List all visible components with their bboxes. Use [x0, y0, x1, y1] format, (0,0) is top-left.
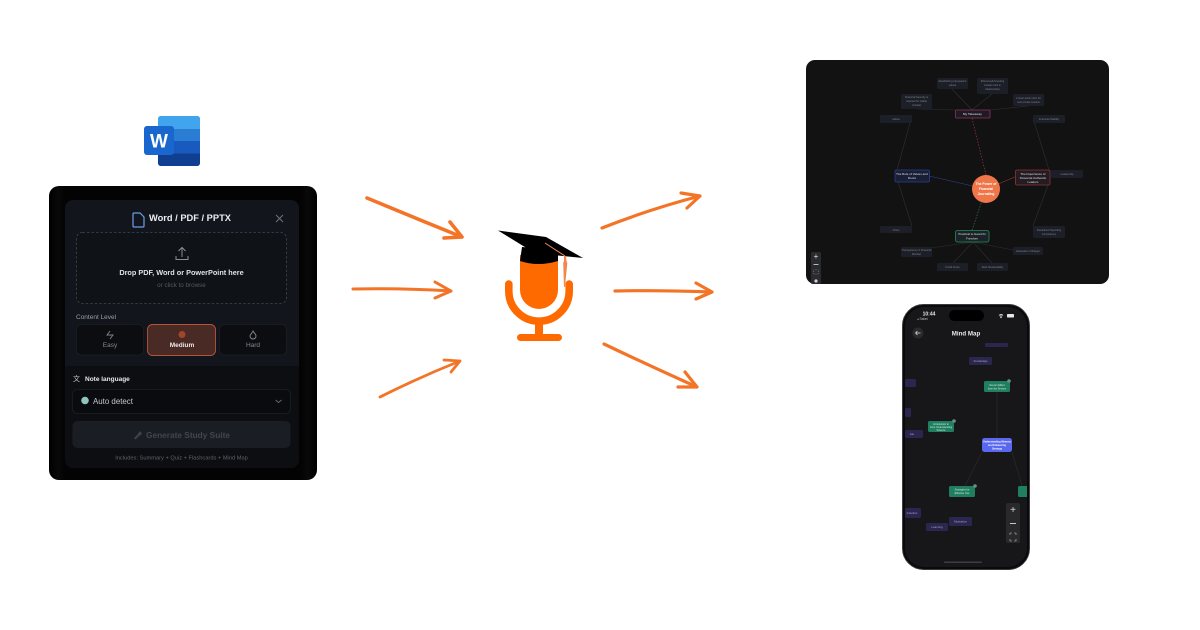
button: Easy	[76, 324, 144, 355]
node: green branch: Practical to Guard In	[958, 232, 986, 236]
leaf labels: Disciplined Spending	[1037, 228, 1062, 232]
arrow: input bottom	[380, 360, 460, 397]
central node: Journaling	[978, 192, 994, 196]
button: Medium selected	[148, 324, 216, 356]
node: blue branch: The Role of Values and	[896, 172, 928, 176]
cap skull	[520, 247, 558, 264]
mic base	[517, 334, 562, 341]
leaf labels: relationships	[985, 87, 1000, 91]
language select	[72, 390, 290, 414]
upload drop zone: or click to browse	[157, 282, 206, 289]
panel: upload dialog screenshot	[49, 186, 317, 480]
node: green branch	[956, 230, 989, 242]
green node labels: Neuron Effect	[989, 384, 1005, 387]
mic cradle	[509, 284, 569, 321]
purple node labels: Learning	[932, 525, 943, 529]
arrow: output top	[602, 193, 700, 228]
header: back button and title	[912, 328, 980, 338]
button: Medium selected: Medium	[170, 342, 194, 349]
leaf labels: Debt Sustainability	[982, 265, 1004, 269]
central blue node: and Enhancing	[988, 444, 1006, 447]
central blue node	[982, 438, 1012, 452]
note language label: Note language	[85, 376, 130, 383]
button: Hard: Hard	[246, 342, 260, 349]
button: Hard	[220, 324, 286, 355]
leaf labels: A clear action item for	[1016, 96, 1041, 100]
dialog panel	[65, 200, 299, 468]
central blue node: Strategy	[992, 448, 1003, 450]
language select: Auto detect	[93, 397, 134, 406]
arrow: output bottom	[604, 344, 697, 387]
node: My Takeaway: My Takeaway	[963, 112, 982, 116]
arrow: input top	[367, 198, 462, 238]
leaf nodes	[880, 78, 1083, 271]
dialog heading	[133, 213, 232, 227]
phone zoom controls	[1006, 503, 1020, 543]
leaf labels: Financial Stability	[1039, 117, 1060, 121]
leaf labels: Mindset	[912, 252, 921, 256]
purple node labels: Intention	[907, 511, 918, 515]
zoom controls: +	[814, 252, 819, 261]
leaf labels: creates trust in	[984, 83, 1002, 87]
home indicator	[944, 562, 982, 563]
icon: close	[276, 215, 283, 222]
node: red branch: Financial Authentic	[1020, 176, 1047, 180]
mic capsule	[520, 255, 558, 309]
green node labels	[930, 384, 1007, 495]
green node labels: from the Senses	[988, 388, 1007, 390]
node: green branch: Freedom	[966, 236, 978, 240]
green nodes	[928, 381, 1028, 497]
leaf labels: Transparency in Financial	[902, 248, 932, 252]
leaf labels: required for stable	[906, 99, 928, 103]
phone zoom controls: +	[1010, 505, 1016, 516]
leaf labels	[892, 79, 1074, 269]
leaf labels: Financial Security is	[905, 95, 929, 99]
content level label: Content Level	[76, 314, 117, 321]
purple node labels: Ato	[910, 432, 915, 436]
phone connectors	[965, 392, 1022, 486]
central blue node: Understanding Memory	[983, 440, 1012, 444]
button: Generate Study Suite: Generate Study Suite	[146, 430, 230, 440]
purple node labels: Knowledge	[974, 359, 988, 363]
arrow: output middle	[615, 283, 712, 299]
mind map connectors	[897, 89, 1049, 263]
panel: phone mind map	[902, 304, 1030, 570]
header: back button and title: Mind Map	[952, 330, 980, 338]
status bar: 10:44	[923, 312, 936, 318]
leaf labels: mindset	[912, 103, 921, 107]
central node: Financial	[979, 187, 993, 191]
status bar	[917, 310, 1014, 321]
green node labels: Core Understanding	[930, 426, 953, 429]
node: red branch: The Importance of	[1020, 172, 1046, 176]
purple node labels	[907, 359, 988, 529]
upload drop zone	[76, 232, 286, 304]
button: Easy: Easy	[103, 342, 118, 349]
purple nodes	[905, 343, 1008, 531]
icon: Word logo: W	[150, 132, 168, 152]
central node: The Power of	[976, 182, 997, 186]
note language label	[73, 374, 130, 383]
upload drop zone: Drop PDF, Word or PowerPoint here	[119, 268, 244, 277]
node: blue branch: Roots	[908, 176, 916, 180]
dialog heading: Word / PDF / PPTX	[149, 213, 232, 223]
icon: microphone with graduation cap	[498, 230, 583, 341]
leaf labels: Ethical self-branding	[981, 79, 1005, 83]
green node labels: Effective Use	[955, 492, 970, 495]
leaf labels: Credit Score	[945, 265, 960, 269]
green node labels: Introduction to	[933, 423, 950, 426]
green node badges	[952, 379, 1011, 488]
note language label: 文	[73, 374, 80, 383]
leaf labels: Education in Budget	[1016, 249, 1040, 253]
node: red branch: Leaders	[1027, 180, 1039, 184]
leaf labels: Leadership	[1061, 172, 1074, 176]
leaf labels: values	[892, 117, 900, 121]
tassel	[545, 243, 567, 287]
includes note: Includes: Summary + Quiz + Flashcards + Mind Map	[115, 456, 248, 462]
purple node labels: Motivation	[954, 520, 967, 524]
green node labels: Science	[937, 429, 946, 432]
leaf labels: next private session	[1017, 100, 1041, 104]
leaf labels: values	[949, 83, 957, 87]
node: red branch	[1016, 170, 1050, 185]
leaf labels: Client	[893, 228, 900, 232]
leaf labels: Establishing transparent	[939, 79, 967, 83]
status bar: ◂ Safari	[917, 317, 928, 321]
node: blue branch	[895, 170, 930, 182]
panel: desktop mind map	[806, 60, 1109, 284]
zoom controls	[811, 252, 821, 284]
node: My Takeaway	[956, 110, 990, 118]
green node labels: Strategies for	[955, 488, 970, 492]
icon: Word logo	[144, 116, 200, 166]
mic stand	[535, 320, 543, 335]
mortarboard	[498, 230, 583, 258]
central node	[972, 175, 1000, 203]
button: Generate Study Suite	[72, 421, 290, 448]
arrow: input middle	[353, 282, 451, 298]
leaf labels: Consistency	[1042, 232, 1057, 236]
